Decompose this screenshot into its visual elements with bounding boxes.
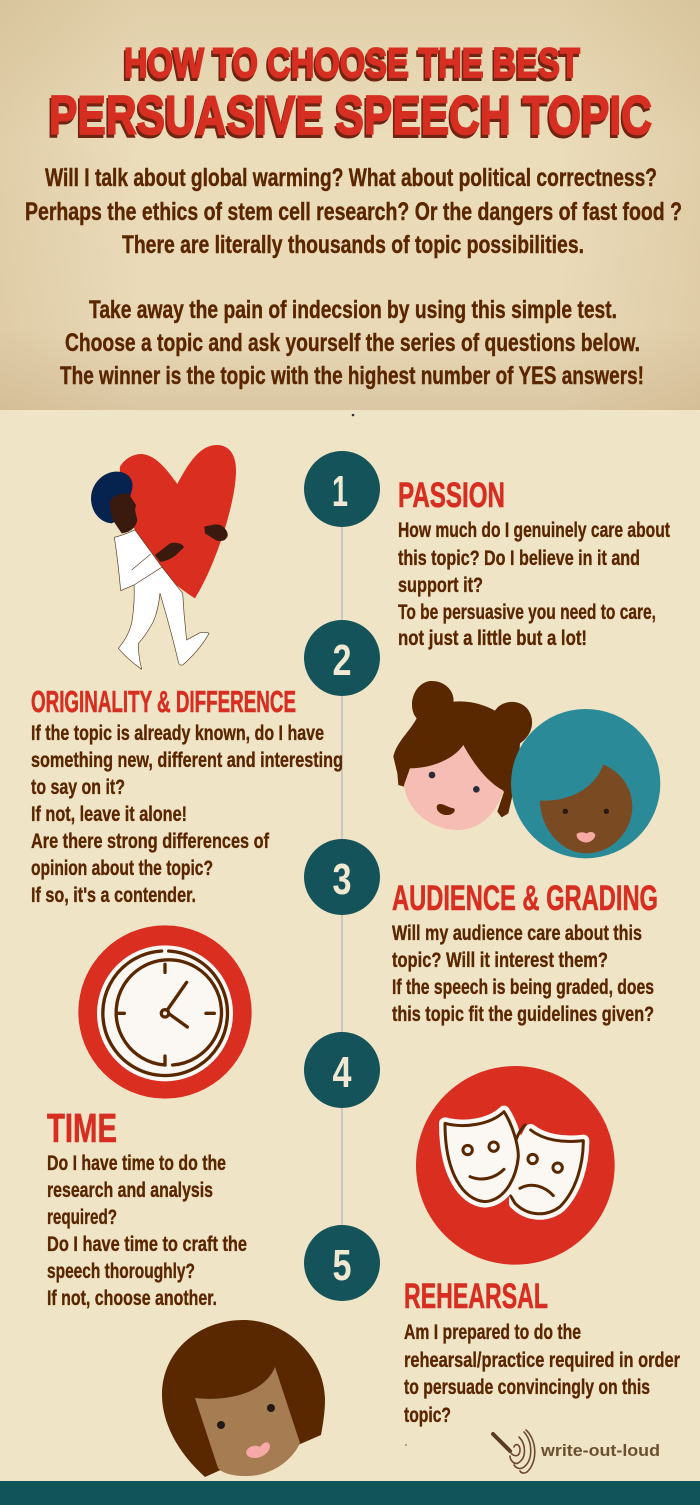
number 3 [304, 839, 380, 915]
panel: passion text: not just a little but a lot! [398, 627, 587, 650]
intro text [25, 164, 682, 416]
panel: originality text: If not, leave it alone! [31, 803, 187, 826]
panel: passion text: PASSION [398, 476, 505, 515]
number 2 [304, 620, 380, 696]
logo: write-out-loud [493, 1430, 660, 1473]
number 5 [304, 1225, 380, 1301]
panel: time text: If not, choose another. [47, 1287, 217, 1310]
panel: originality text [31, 684, 343, 907]
panel: audience text [392, 879, 658, 1026]
icon: two faces [393, 681, 660, 858]
icon: clock [78, 925, 252, 1099]
icon: person hugging heart [91, 445, 236, 669]
panel: time text: TIME [47, 1105, 117, 1151]
icon: theatre masks [416, 1066, 615, 1265]
panel: rehearsal text: REHEARSAL [404, 1277, 548, 1316]
title: HOW TO CHOOSE THE BEST [122, 42, 579, 89]
panel: time text: speech thoroughly? [47, 1260, 195, 1283]
panel: time text [47, 1105, 247, 1310]
panel: originality text: something new, different and interesting [31, 749, 343, 772]
number 1 [304, 451, 380, 527]
number 1: 1 [332, 467, 348, 516]
title [48, 39, 652, 149]
panel: originality text: ORIGINALITY & DIFFERENCE [31, 684, 296, 719]
panel: audience text: topic? Will it interest them? [392, 949, 608, 972]
panel: originality text: to say on it? [31, 776, 125, 799]
timeline line [341, 489, 343, 1263]
panel: rehearsal text [404, 1277, 680, 1446]
panel: passion text [398, 476, 670, 650]
panel: rehearsal text: topic? [404, 1404, 451, 1427]
number 4: 4 [332, 1048, 352, 1097]
number 5: 5 [332, 1241, 352, 1290]
footer bar [0, 1481, 700, 1505]
icon: face with bob hair [162, 1320, 325, 1477]
logo: write-out-loud: write-out-loud [540, 1441, 660, 1460]
panel: originality text: Are there strong differences of [31, 830, 270, 853]
panel: originality text: opinion about the topic? [31, 857, 213, 880]
number 3: 3 [332, 855, 352, 904]
panel: originality text: If so, it's a contender. [31, 884, 196, 907]
number 2: 2 [332, 636, 352, 685]
panel: time text: required? [47, 1206, 117, 1229]
panel: originality text: If the topic is already known, do I have [31, 722, 324, 745]
panel: time text: Do I have time to do the [47, 1152, 226, 1175]
panel: time text: research and analysis [47, 1179, 213, 1202]
title: HOW TO CHOOSE THE BEST [124, 39, 580, 86]
panel: time text: Do I have time to craft the [47, 1233, 247, 1256]
panel: passion text: support it? [398, 574, 483, 597]
panel: rehearsal text: Am I prepared to do the [404, 1321, 581, 1344]
number 4 [304, 1032, 380, 1108]
